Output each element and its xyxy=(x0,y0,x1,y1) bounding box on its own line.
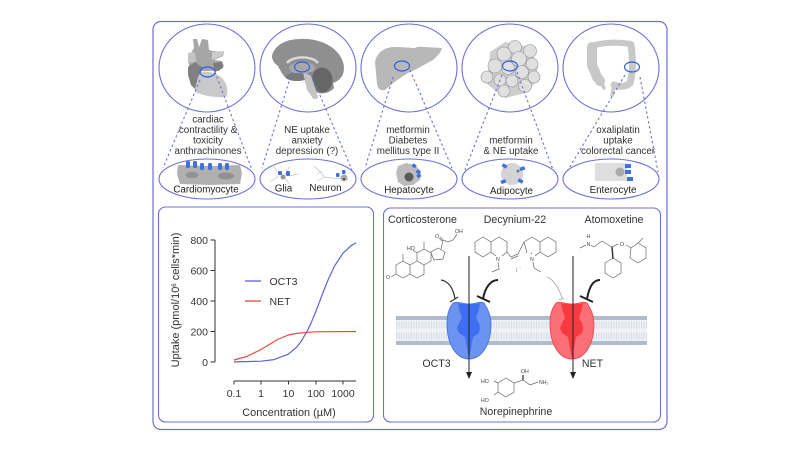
cell: hepatocyte: Hepatocyte xyxy=(384,185,434,196)
y axis: 400 xyxy=(190,296,208,308)
transporter: NET xyxy=(550,302,594,359)
molecule: norepinephrine: HO xyxy=(481,379,489,385)
molecule: norepinephrine: OH xyxy=(521,369,529,375)
molecule: norepinephrine xyxy=(481,369,549,404)
drug names: Decynium-22 xyxy=(484,214,546,226)
text: brain effects: NE uptake xyxy=(284,125,330,136)
y axis title: cells*min) xyxy=(170,233,182,283)
cell: enterocyte xyxy=(563,159,659,199)
cell: enterocyte: Enterocyte xyxy=(590,185,637,196)
molecule: decynium-22: N xyxy=(530,257,534,263)
text: adipose effects: & NE uptake xyxy=(483,146,539,157)
blue marker: liver xyxy=(394,61,410,71)
icon: brain xyxy=(272,39,344,99)
text: colon effects: colorectal cancer xyxy=(581,146,656,157)
panel: uptake chart xyxy=(158,207,374,422)
molecule: atomoxetine: O xyxy=(620,242,624,248)
legend: NET xyxy=(270,296,291,308)
molecule: decynium-22: I xyxy=(516,268,518,274)
text: heart effects: contractility & xyxy=(179,125,238,136)
legend xyxy=(245,276,298,308)
molecule: atomoxetine xyxy=(580,234,646,278)
text: adipose effects xyxy=(483,136,539,157)
inhibitor: decynium-22 on NET xyxy=(547,277,564,300)
outer frame xyxy=(153,22,667,430)
molecule: decynium-22: N xyxy=(496,257,500,263)
molecule: atomoxetine: H xyxy=(586,234,590,240)
cell: adipocyte: Adipocyte xyxy=(490,186,534,197)
molecule: norepinephrine: HO xyxy=(481,398,489,404)
curve: NET xyxy=(234,332,356,360)
molecule: corticosterone: O xyxy=(435,234,439,240)
cell: glia and neuron xyxy=(260,159,356,199)
x axis: 100 xyxy=(307,388,325,400)
text: heart effects xyxy=(174,114,242,157)
blue marker: heart xyxy=(200,67,215,77)
inhibitor: decynium-22 on OCT3 xyxy=(477,280,498,302)
transporter labels: NET xyxy=(582,358,604,370)
y axis xyxy=(190,235,215,369)
inhibitor: corticosterone on OCT3 xyxy=(441,280,458,302)
x axis: 1 xyxy=(258,388,264,400)
text: liver effects: metformin xyxy=(386,125,430,136)
text: heart effects: anthrachinones xyxy=(174,146,242,157)
y axis: 600 xyxy=(190,266,208,278)
text: colon effects xyxy=(581,125,656,157)
text: heart effects: cardiac xyxy=(192,114,224,126)
panel: heart tissue xyxy=(159,24,255,112)
y axis title: Uptake (pmol/10 xyxy=(170,287,182,367)
drug names: Corticosterone xyxy=(388,214,457,226)
cell: cardiomyocyte: Cardiomyocyte xyxy=(173,184,239,196)
molecule: norepinephrine: NH₂ xyxy=(539,380,549,386)
membrane xyxy=(396,318,647,343)
icon: liver xyxy=(375,47,442,90)
x axis title: Concentration (µM) xyxy=(242,407,336,419)
drug names: Atomoxetine xyxy=(585,214,644,226)
transporter: OCT3 xyxy=(447,302,491,359)
panel: transport mechanism xyxy=(384,208,660,422)
molecule: decynium-22: − xyxy=(518,265,522,270)
molecule: atomoxetine: N xyxy=(586,242,590,248)
molecule: corticosterone: HO xyxy=(407,246,415,252)
icon: adipose cluster xyxy=(481,40,540,98)
zoom guide lines xyxy=(163,70,658,172)
cell: cardiomyocyte xyxy=(159,159,255,199)
text: liver effects: Diabetes xyxy=(389,136,427,146)
icon: heart xyxy=(188,39,227,97)
text: colon effects: uptake xyxy=(603,136,633,146)
molecule: corticosterone: OH xyxy=(455,229,463,235)
blue marker: adipose xyxy=(502,61,518,71)
y axis: 800 xyxy=(190,235,208,247)
x axis: 1000 xyxy=(331,388,355,400)
inhibitor: atomoxetine on NET xyxy=(580,280,600,302)
molecule: decynium-22: + xyxy=(530,251,533,256)
transporter labels xyxy=(422,358,604,370)
text: colon effects: oxaliplatin xyxy=(596,125,640,136)
panel: brain tissue xyxy=(260,24,356,112)
text: brain effects xyxy=(276,125,338,157)
y axis: 200 xyxy=(190,326,208,338)
legend: OCT3 xyxy=(270,276,298,288)
y axis title: 6 xyxy=(172,283,178,287)
arrow: NET transport xyxy=(570,256,576,379)
panel: liver tissue xyxy=(361,24,457,112)
molecule: decynium-22 xyxy=(475,237,556,274)
text: heart effects: toxicity xyxy=(193,136,223,146)
cell: glia and neuron: Glia xyxy=(275,184,293,194)
molecule: corticosterone: O xyxy=(386,275,390,281)
text: adipose effects: metformin xyxy=(489,136,533,146)
curve: OCT3 xyxy=(234,243,356,362)
text: brain effects: depression (?) xyxy=(276,146,338,157)
y axis: 0 xyxy=(202,357,208,369)
text: liver effects: mellitus type II xyxy=(377,146,439,157)
panel: adipose tissue xyxy=(462,24,558,112)
cell: adipocyte xyxy=(462,159,558,199)
text: brain effects: anxiety xyxy=(291,136,323,146)
cell: hepatocyte xyxy=(361,159,457,199)
molecule: corticosterone xyxy=(386,229,463,281)
drug names xyxy=(388,214,644,226)
arrow: OCT3 transport xyxy=(466,256,472,379)
label: norepinephrine: Norepinephrine xyxy=(480,406,552,418)
blue marker: colon xyxy=(624,62,640,72)
text: liver effects xyxy=(377,125,439,157)
panel: colon tissue xyxy=(563,24,659,112)
cell: glia and neuron: Neuron xyxy=(309,183,342,194)
x axis xyxy=(227,381,356,400)
transporter labels: OCT3 xyxy=(422,358,451,370)
icon: colon xyxy=(592,43,632,95)
x axis: 0.1 xyxy=(227,388,241,400)
x axis: 10 xyxy=(283,388,294,400)
blue marker: brain xyxy=(294,62,310,72)
